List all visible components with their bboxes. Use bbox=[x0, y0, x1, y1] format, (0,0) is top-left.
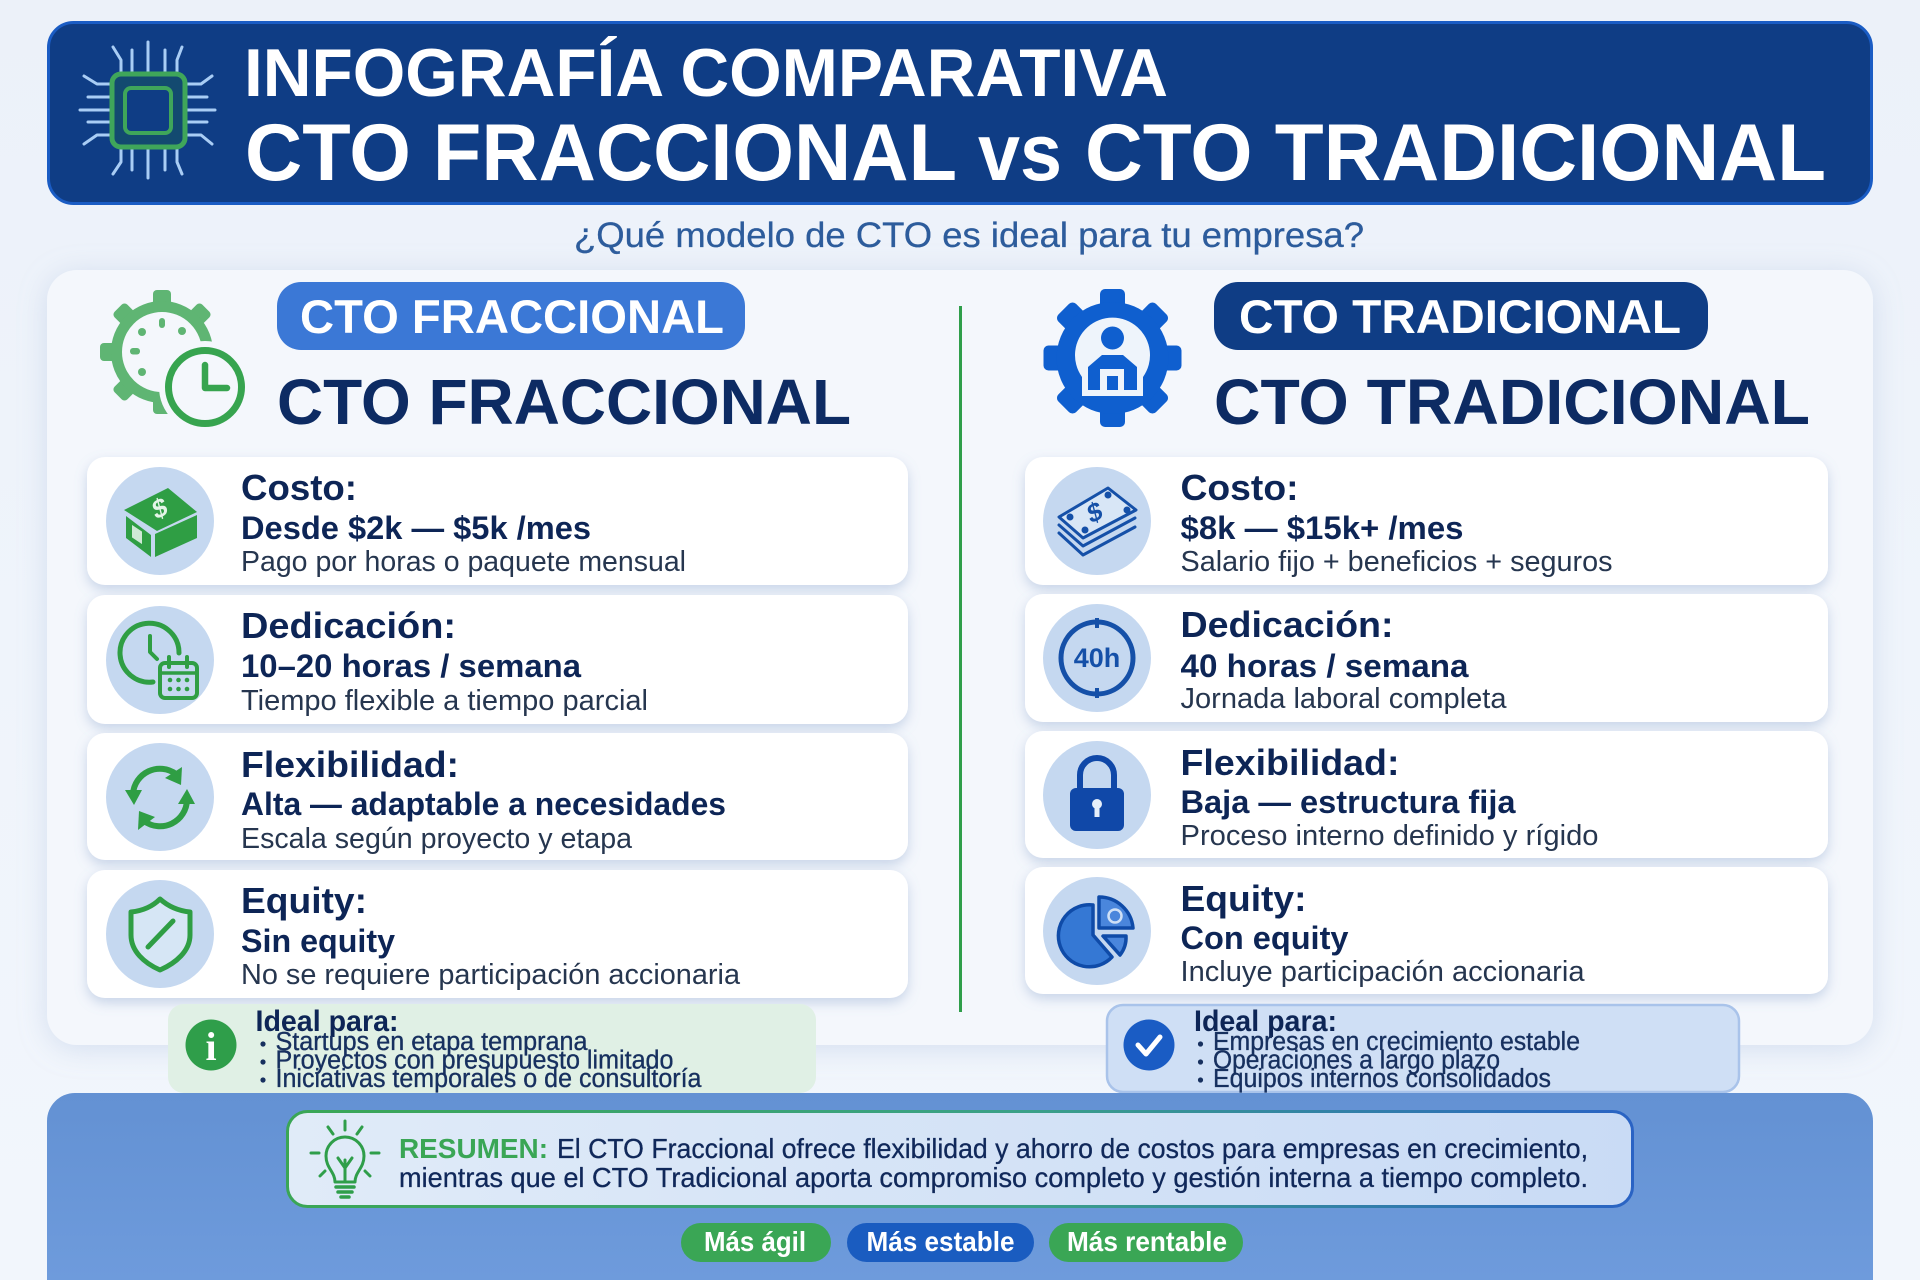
pill: más ágil: Más ágil bbox=[704, 1226, 806, 1257]
callout: ideal para fraccional: Proyectos con presupuesto limitado bbox=[276, 1046, 674, 1074]
badge: CTO tradicional bbox=[1214, 282, 1708, 350]
badge: CTO fraccional: CTO FRACCIONAL bbox=[300, 290, 724, 343]
panel: comparison background bbox=[47, 270, 1873, 1045]
icon: sync arrows bbox=[106, 743, 214, 851]
pill: más estable bbox=[847, 1223, 1034, 1262]
callout: ideal para tradicional: Equipos internos consolidados bbox=[1213, 1065, 1551, 1093]
card: flexibilidad bbox=[1025, 731, 1828, 858]
icon: stack of bills bbox=[1043, 467, 1151, 575]
card: equity: Sin equity bbox=[241, 923, 395, 959]
callout: ideal para fraccional: Startups en etapa temprana bbox=[276, 1028, 588, 1056]
panel: CTO tradicional bbox=[1025, 282, 1828, 1093]
card: flexibilidad: Proceso interno definido y rígido bbox=[1180, 820, 1598, 852]
card: dedicación: Tiempo flexible a tiempo parcial bbox=[241, 685, 648, 717]
icon: money box bbox=[106, 467, 214, 575]
icon: circuit chip bbox=[80, 42, 215, 178]
center divider bbox=[959, 306, 962, 1012]
title line 2: CTO FRACCIONAL bbox=[245, 108, 957, 198]
callout: ideal para fraccional: Ideal para: bbox=[256, 1005, 398, 1038]
header banner bbox=[48, 22, 1872, 204]
title line 2 bbox=[245, 108, 1826, 198]
icon: gear with clock bbox=[100, 290, 251, 433]
card: equity bbox=[1025, 867, 1828, 994]
card: flexibilidad: Escala según proyecto y etapa bbox=[241, 823, 632, 855]
card: costo: Costo: bbox=[241, 467, 357, 508]
callout: ideal para fraccional: Iniciativas temporales o de consultoría bbox=[276, 1065, 702, 1093]
summary box: RESUMEN: bbox=[399, 1133, 548, 1164]
card: equity: Con equity bbox=[1180, 920, 1349, 956]
card: equity: Incluye participación accionaria bbox=[1180, 956, 1585, 988]
callout: ideal para tradicional: Ideal para: bbox=[1194, 1005, 1337, 1038]
icon: clock and calendar bbox=[106, 606, 214, 714]
card: costo: $8k — $15k+ /mes bbox=[1180, 510, 1464, 546]
card: dedicación: 10–20 horas / semana bbox=[241, 648, 581, 684]
card: dedicación: Jornada laboral completa bbox=[1180, 683, 1507, 715]
card: dedicación bbox=[1025, 594, 1828, 722]
panel: CTO fraccional bbox=[87, 282, 908, 1093]
card: equity: Equity: bbox=[1180, 878, 1306, 919]
heading: CTO tradicional: CTO TRADICIONAL bbox=[1214, 366, 1810, 438]
card: costo bbox=[1025, 457, 1828, 585]
callout: ideal para tradicional: Empresas en crecimiento estable bbox=[1213, 1028, 1580, 1056]
card: flexibilidad: Flexibilidad: bbox=[241, 744, 459, 785]
heading: CTO fraccional: CTO FRACCIONAL bbox=[277, 366, 851, 438]
summary box: mientras que el CTO Tradicional aporta compromiso completo y gestión interna a tiempo completo. bbox=[399, 1162, 1588, 1193]
icon: money box: $ bbox=[149, 490, 170, 526]
badge: CTO tradicional: CTO TRADICIONAL bbox=[1239, 290, 1681, 343]
icon: 40 hours clock: 40h bbox=[1074, 643, 1120, 673]
summary box: El CTO Fraccional ofrece flexibilidad y ahorro de costos para empresas en crecimiento, bbox=[557, 1133, 1588, 1164]
card: costo: Salario fijo + beneficios + seguros bbox=[1180, 546, 1612, 578]
title line 1: INFOGRAFÍA COMPARATIVA bbox=[244, 35, 1168, 111]
card: dedicación bbox=[87, 595, 908, 724]
icon: info: i bbox=[205, 1024, 217, 1069]
card: dedicación: Dedicación: bbox=[241, 605, 456, 646]
card: equity: Equity: bbox=[241, 880, 367, 921]
summary band bbox=[47, 1093, 1873, 1280]
icon: lightbulb bbox=[311, 1121, 379, 1197]
card: flexibilidad: Alta — adaptable a necesidades bbox=[241, 786, 726, 822]
subtitle: ¿Qué modelo de CTO es ideal para tu empresa? bbox=[574, 216, 1364, 255]
icon: padlock bbox=[1043, 741, 1151, 849]
card: costo: Desde $2k — $5k /mes bbox=[241, 510, 591, 546]
icon: 40 hours clock bbox=[1043, 604, 1151, 712]
card: flexibilidad: Flexibilidad: bbox=[1180, 742, 1400, 783]
icon: info bbox=[186, 1020, 236, 1070]
pill: más ágil bbox=[681, 1223, 831, 1262]
title line 2: CTO TRADICIONAL bbox=[1085, 108, 1826, 198]
callout: ideal para tradicional bbox=[1107, 1005, 1739, 1093]
summary box bbox=[288, 1112, 1632, 1206]
card: dedicación: Dedicación: bbox=[1180, 604, 1394, 645]
callout: ideal para tradicional: Operaciones a largo plazo bbox=[1213, 1046, 1500, 1074]
icon: shield bbox=[106, 880, 214, 988]
card: costo: Pago por horas o paquete mensual bbox=[241, 546, 686, 578]
icon: stack of bills: $ bbox=[1084, 494, 1105, 530]
card: flexibilidad bbox=[87, 733, 908, 860]
card: costo: Costo: bbox=[1180, 467, 1298, 508]
pill: más estable: Más estable bbox=[866, 1226, 1014, 1257]
card: equity: No se requiere participación accionaria bbox=[241, 959, 740, 991]
callout: ideal para fraccional bbox=[168, 1004, 816, 1093]
card: costo bbox=[87, 457, 908, 585]
icon: gear with person and house bbox=[1044, 289, 1182, 427]
pill: más rentable: Más rentable bbox=[1067, 1226, 1227, 1257]
icon: check bbox=[1124, 1020, 1174, 1070]
card: equity bbox=[87, 870, 908, 998]
title line 2: vs bbox=[978, 108, 1062, 198]
icon: pie chart bbox=[1043, 877, 1151, 985]
card: dedicación: 40 horas / semana bbox=[1180, 648, 1469, 684]
card: flexibilidad: Baja — estructura fija bbox=[1180, 784, 1516, 820]
